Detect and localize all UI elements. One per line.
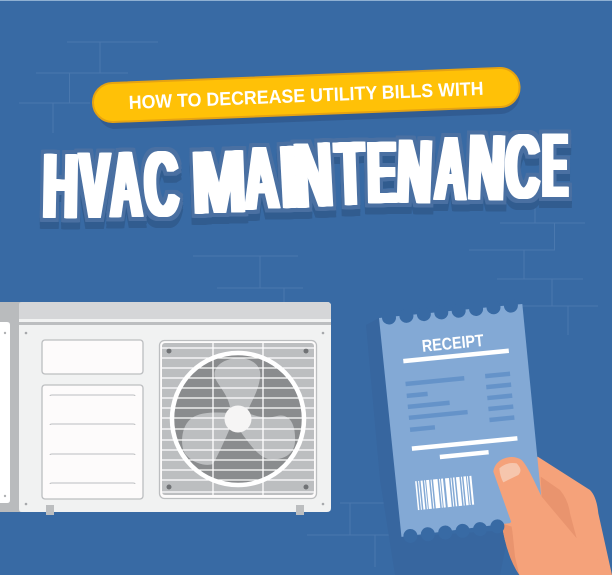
title: E [543, 114, 567, 217]
title: E [367, 123, 397, 222]
banner text: HOW TO DECREASE UTILITY BILLS WITH [128, 79, 484, 114]
unit body [19, 302, 331, 512]
receipt heading: RECEIPT [421, 331, 485, 356]
fan blades [182, 358, 295, 465]
barcode [415, 476, 474, 510]
receipt scallops [381, 298, 540, 544]
title: N [467, 116, 506, 222]
side panel [0, 302, 24, 512]
receipt totals lines [412, 436, 519, 462]
title: A [434, 119, 467, 221]
receipt [378, 297, 544, 544]
fan grille [160, 340, 316, 498]
title: M [191, 130, 247, 234]
hand back [502, 457, 612, 575]
title: I [278, 126, 299, 228]
title: V [80, 132, 109, 239]
title: N [292, 122, 335, 228]
yellow banner [93, 68, 520, 129]
title: N [396, 121, 433, 224]
hand thumb [493, 457, 612, 575]
upper panel [42, 340, 143, 374]
thumbnail [499, 463, 520, 482]
louvered panel [42, 385, 143, 499]
title: C [506, 116, 539, 218]
air conditioner unit [0, 302, 331, 515]
hand shading [541, 477, 577, 538]
title: T [334, 122, 366, 226]
title [42, 114, 567, 239]
title: A [242, 128, 280, 230]
receipt shadow [366, 318, 509, 575]
title: H [42, 134, 79, 238]
feet [46, 505, 304, 515]
title: A [109, 132, 142, 238]
title: C [143, 132, 180, 237]
receipt line items [405, 371, 515, 432]
